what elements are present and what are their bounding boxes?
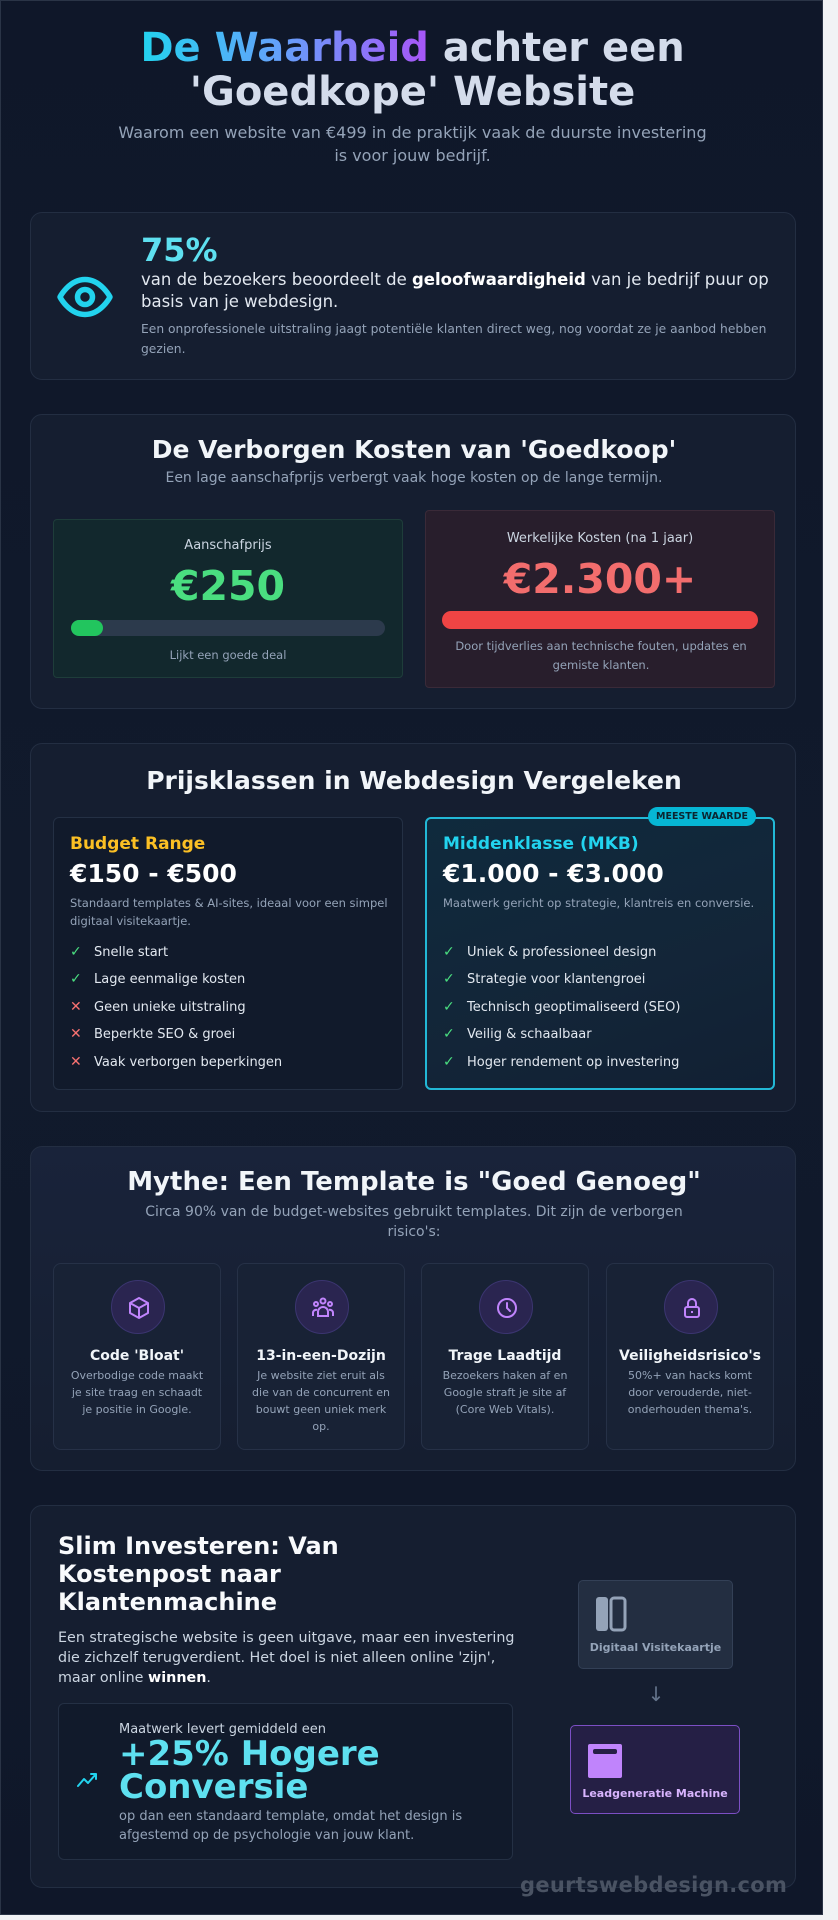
box: budget: ✓: [70, 971, 82, 987]
box: budget: Beperkte SEO & groei: [94, 1027, 235, 1042]
box: mid range: €1.000 - €3.000: [443, 859, 664, 888]
box: budget: Snelle start: [94, 945, 168, 960]
stat note: Een onprofessionele uitstraling jaagt potentiële klanten direct weg, nog voordat ze je aanbod hebben gezien.: [141, 322, 766, 356]
box: budget: [53, 817, 403, 1090]
box: mid range: Uniek & professioneel design: [467, 945, 656, 960]
badge: MEESTE WAARDE: [656, 811, 748, 822]
sub: Circa 90% van de budget-websites gebruikt templates. Dit zijn de verborgen risico's:: [145, 1204, 683, 1240]
risk: code bloat: [53, 1263, 221, 1450]
box: mid range: Veilig & schaalbaar: [467, 1027, 592, 1042]
stat text: van de bezoekers beoordeelt de geloofwaardigheid van je bedrijf puur op basis van je webdesign.: [141, 270, 769, 311]
callout: conversion: Maatwerk levert gemiddeld een: [119, 1722, 326, 1737]
heading: De Verborgen Kosten van 'Goedkoop': [152, 435, 676, 464]
box: mid range: ✓: [443, 971, 455, 987]
sub: Een lage aanschafprijs verbergt vaak hoge kosten op de lange termijn.: [165, 470, 663, 486]
panel: hidden costs: [30, 414, 796, 709]
box: budget: Vaak verborgen beperkingen: [94, 1055, 282, 1070]
box: mid range: ✓: [443, 1054, 455, 1070]
box: real cost: Werkelijke Kosten (na 1 jaar): [507, 531, 693, 546]
box: budget: €150 - €500: [70, 859, 237, 888]
stat number: 75%: [141, 231, 218, 269]
flow: lead machine: [570, 1725, 740, 1814]
box: mid range: ✓: [443, 944, 455, 960]
risk: code bloat: Code 'Bloat': [90, 1348, 184, 1364]
box: mid range: Strategie voor klantengroei: [467, 972, 645, 987]
risk: security: [606, 1263, 774, 1450]
subtitle: Waarom een website van €499 in de praktijk vaak de duurste investering is voor jouw bedrijf.: [118, 123, 707, 165]
panel: price classes: [30, 743, 796, 1112]
icon: trend: [77, 1773, 97, 1787]
box: mid range: ✓: [443, 999, 455, 1015]
box: purchase price: Lijkt een goede deal: [170, 648, 286, 662]
box: purchase price: Aanschafprijs: [184, 538, 272, 553]
box: budget: Standaard templates & AI-sites, ideaal voor een simpel digitaal visitekaartje.: [70, 896, 388, 928]
heading: Slim Investeren: Van Kostenpost naar Klantenmachine: [58, 1532, 339, 1616]
box: real cost: Door tijdverlies aan technische fouten, updates en gemiste klanten.: [455, 639, 747, 672]
risk: code bloat: Overbodige code maakt je site traag en schaadt je positie in Google.: [71, 1369, 203, 1416]
box: real cost: €2.300+: [504, 555, 696, 603]
flow: business card: [578, 1580, 733, 1669]
badge: [648, 807, 756, 826]
flow: business card: Digitaal Visitekaartje: [590, 1641, 721, 1654]
box: budget: Budget Range: [70, 834, 205, 854]
box: budget: ✕: [70, 1054, 82, 1070]
risk: dozen: [237, 1263, 405, 1450]
panel: smart investing: [30, 1505, 796, 1888]
risk: security: Veiligheidsrisico's: [619, 1348, 761, 1364]
title: [140, 25, 685, 115]
box: budget: ✕: [70, 1026, 82, 1042]
box: budget: ✓: [70, 944, 82, 960]
icon: eye: [57, 276, 113, 318]
title: De Waarheid achter een: [140, 25, 685, 71]
risk: slow: Bezoekers haken af en Google straft je site af (Core Web Vitals).: [443, 1369, 567, 1416]
heading: Prijsklassen in Webdesign Vergeleken: [146, 766, 682, 795]
risk: slow: [421, 1263, 589, 1450]
box: mid range: [425, 817, 775, 1090]
callout: conversion: op dan een standaard template, omdat het design is afgestemd op de psychologie van jouw klant.: [119, 1809, 462, 1843]
risk: dozen: Je website ziet eruit als die van de concurrent en bouwt geen uniek merk op.: [252, 1369, 390, 1433]
watermark: geurtswebdesign.com: [520, 1873, 787, 1897]
risk: security: 50%+ van hacks komt door verouderde, niet-onderhouden thema's.: [628, 1369, 752, 1416]
box: budget: ✕: [70, 999, 82, 1015]
panel: template myth: [30, 1146, 796, 1471]
box: mid range: Hoger rendement op investering: [467, 1055, 679, 1070]
box: mid range: Maatwerk gericht op strategie, klantreis en conversie.: [443, 896, 754, 910]
arrow: ↓: [648, 1682, 664, 1706]
callout: conversion: +25% Hogere Conversie: [119, 1734, 380, 1807]
box: mid range: Middenklasse (MKB): [443, 834, 639, 854]
heading: Mythe: Een Template is "Goed Genoeg": [127, 1167, 701, 1197]
risk: dozen: 13-in-een-Dozijn: [256, 1348, 386, 1364]
risk: slow: Trage Laadtijd: [449, 1348, 561, 1364]
box: purchase price: €250: [171, 562, 285, 610]
box: budget: Lage eenmalige kosten: [94, 972, 245, 987]
box: mid range: Technisch geoptimaliseerd (SEO): [467, 1000, 680, 1015]
callout: conversion: [58, 1703, 513, 1860]
paragraph: Een strategische website is geen uitgave, maar een investering die zichzelf terugverdient. Het doel is niet alleen online 'zijn', maar online winnen.: [58, 1630, 514, 1686]
box: mid range: ✓: [443, 1026, 455, 1042]
box: budget: Geen unieke uitstraling: [94, 1000, 246, 1015]
panel: 75% stat: [30, 212, 796, 380]
box: real cost: [425, 510, 775, 688]
box: purchase price: [53, 519, 403, 678]
title: 'Goedkope' Website: [190, 69, 635, 115]
flow: lead machine: Leadgeneratie Machine: [582, 1787, 728, 1800]
